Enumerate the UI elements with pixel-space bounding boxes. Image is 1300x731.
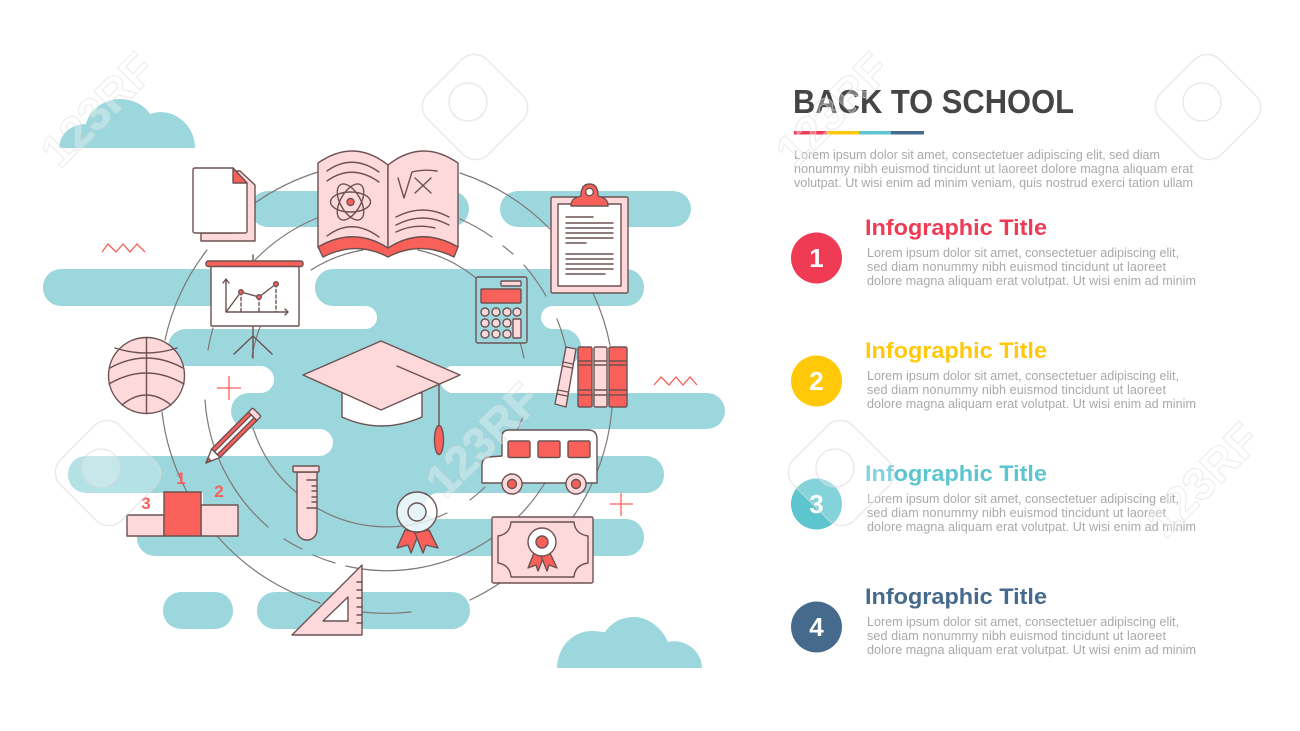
icon: medal bbox=[397, 492, 438, 553]
background bands bbox=[43, 191, 740, 629]
icon: set square bbox=[292, 565, 362, 635]
main title: BACK TO SCHOOL bbox=[793, 83, 1074, 120]
intro paragraph: nonummy nibh euismod tincidunt ut laoreet dolore magna aliquam erat bbox=[794, 162, 1194, 176]
icon: documents bbox=[193, 168, 255, 241]
icon: podium bbox=[127, 469, 238, 536]
icon: pencil bbox=[202, 408, 261, 467]
item 4 text bbox=[867, 615, 1196, 657]
item 3 title: Infographic Title bbox=[865, 461, 1047, 486]
item 1 text: Lorem ipsum dolor sit amet, consectetuer adipiscing elit, bbox=[867, 246, 1179, 260]
podium number 1: 1 bbox=[176, 469, 186, 488]
item 3 text: dolore magna aliquam erat volutpat. Ut wisi enim ad minim bbox=[867, 520, 1196, 534]
icon: stack of books bbox=[555, 347, 627, 407]
icon: basketball bbox=[108, 338, 184, 414]
decorative plus right bbox=[610, 493, 633, 516]
badge 2: 2 bbox=[809, 366, 824, 396]
icon: certificate bbox=[492, 517, 593, 583]
badge 3 bbox=[791, 478, 842, 530]
icon: graduation cap bbox=[303, 341, 460, 454]
item 4 text: sed diam nonummy nibh euismod tincidunt ut laoreet bbox=[867, 629, 1166, 643]
podium number 2: 2 bbox=[214, 482, 224, 501]
item 2 bbox=[791, 338, 1196, 411]
item 2 text: Lorem ipsum dolor sit amet, consectetuer adipiscing elit, bbox=[867, 369, 1179, 383]
stock watermarks: 123RF bbox=[415, 373, 550, 507]
item 1 text bbox=[867, 246, 1196, 288]
item 4 title: Infographic Title bbox=[865, 584, 1047, 609]
item 3 bbox=[791, 461, 1196, 534]
cloud top left bbox=[59, 99, 195, 148]
icon: calculator bbox=[476, 277, 527, 343]
podium number 3: 3 bbox=[141, 494, 151, 513]
item 1 text: dolore magna aliquam erat volutpat. Ut wisi enim ad minim bbox=[867, 274, 1196, 288]
item 3 text: Lorem ipsum dolor sit amet, consectetuer adipiscing elit, bbox=[867, 492, 1179, 506]
badge 1 bbox=[791, 232, 842, 284]
title underline bbox=[794, 131, 924, 134]
item 3 text: sed diam nonummy nibh euismod tincidunt ut laoreet bbox=[867, 506, 1166, 520]
stock watermarks: 123RF bbox=[1135, 413, 1270, 547]
stock watermarks: 123RF bbox=[30, 43, 165, 177]
item 4 text: dolore magna aliquam erat volutpat. Ut wisi enim ad minim bbox=[867, 643, 1196, 657]
item 1 bbox=[791, 215, 1196, 288]
item 2 title: Infographic Title bbox=[865, 338, 1047, 363]
stock watermarks bbox=[30, 43, 1270, 547]
item 2 text: sed diam nonummy nibh euismod tincidunt ut laoreet bbox=[867, 383, 1166, 397]
intro paragraph bbox=[794, 148, 1194, 190]
intro paragraph: volutpat. Ut wisi enim ad minim veniam, quis nostrud exerci tation ullam bbox=[794, 176, 1193, 190]
item 1 text: sed diam nonummy nibh euismod tincidunt ut laoreet bbox=[867, 260, 1166, 274]
icon: clipboard bbox=[551, 184, 628, 293]
icon: school bus bbox=[482, 430, 597, 494]
badge 3: 3 bbox=[809, 489, 824, 519]
decorative zigzag left bbox=[102, 244, 145, 252]
cloud bottom right bbox=[557, 617, 702, 668]
badge 2 bbox=[791, 356, 842, 406]
item 1 title: Infographic Title bbox=[865, 215, 1047, 240]
item 4 bbox=[791, 584, 1196, 657]
icon: presentation chart bbox=[206, 255, 303, 358]
item 3 text bbox=[867, 492, 1196, 534]
item 2 text: dolore magna aliquam erat volutpat. Ut wisi enim ad minim bbox=[867, 397, 1196, 411]
badge 4: 4 bbox=[809, 612, 824, 642]
intro paragraph: Lorem ipsum dolor sit amet, consectetuer adipiscing elit, sed diam bbox=[794, 148, 1160, 162]
icon: open book bbox=[318, 151, 458, 257]
badge 4 bbox=[791, 602, 842, 652]
decorative zigzag right bbox=[654, 377, 697, 385]
badge 1: 1 bbox=[809, 243, 824, 273]
decorative plus left bbox=[217, 376, 241, 400]
item 2 text bbox=[867, 369, 1196, 411]
icon: test tube bbox=[293, 466, 319, 540]
stock watermarks: 123RF bbox=[765, 43, 900, 177]
item 4 text: Lorem ipsum dolor sit amet, consectetuer adipiscing elit, bbox=[867, 615, 1179, 629]
concentric arcs bbox=[162, 172, 612, 613]
